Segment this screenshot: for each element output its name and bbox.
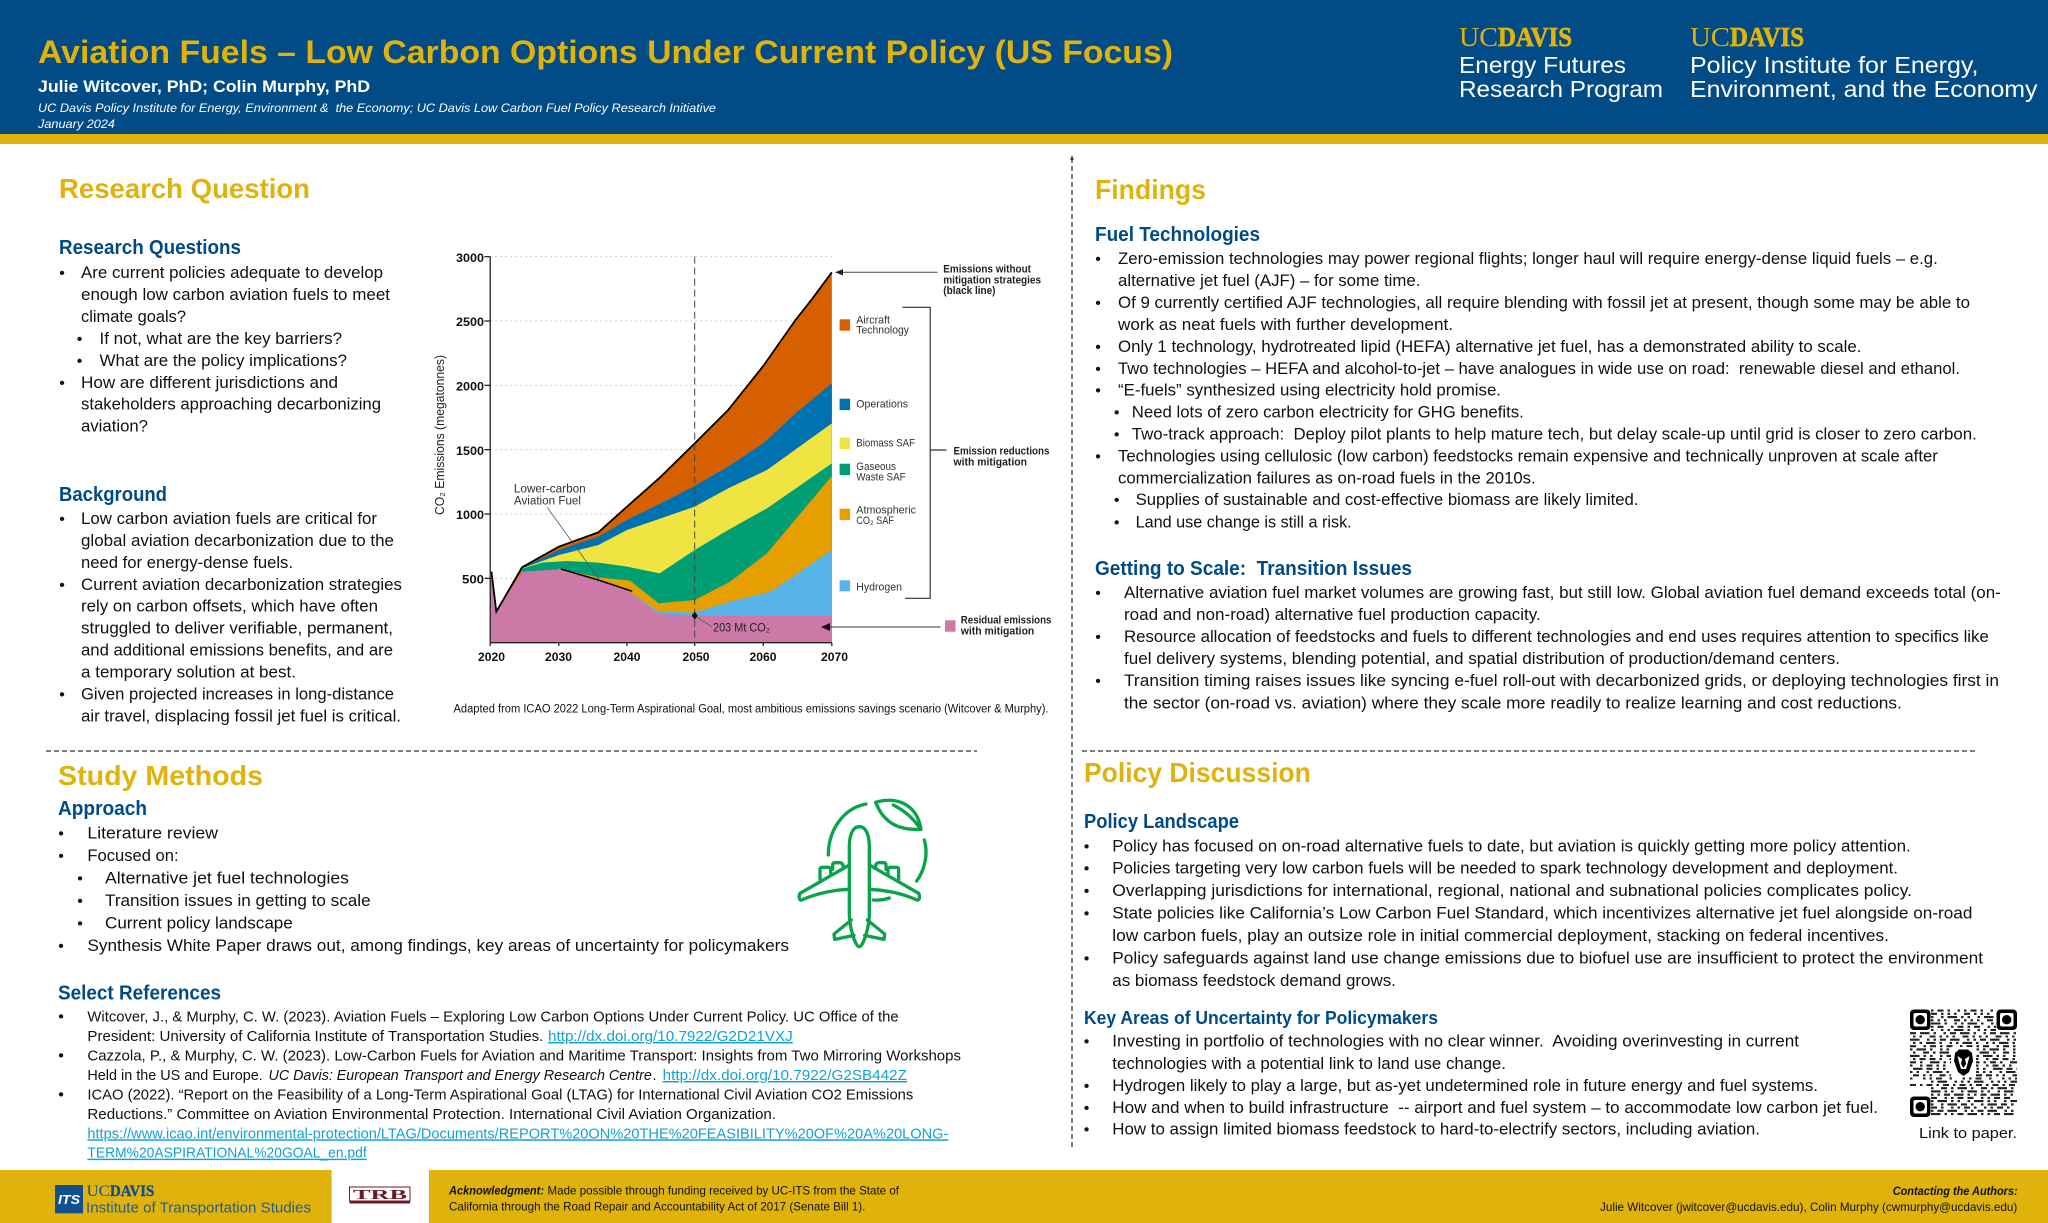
- panel: study methods: [58, 760, 961, 1162]
- date: January 2024: [37, 117, 115, 131]
- authors: Julie Witcover, PhD; Colin Murphy, PhD: [38, 78, 370, 96]
- text block: references: ICAO (2022). “Report on the Feasibility of a Long-Term Aspirational Goal (LTAG) for International Civil Aviation CO2 Emissions: [87, 1087, 913, 1103]
- text block: fuel technologies list: Zero-emission technologies may power regional flights; longer haul will require energy-dense liquid fuels – e.g.: [1118, 250, 1938, 268]
- x axis labels: [478, 650, 848, 664]
- text block: policy landscape list: •: [1084, 951, 1089, 968]
- text block: approach list: •: [58, 938, 64, 955]
- text block: references: http://dx.doi.org/10.7922/G2D21VXJ: [548, 1029, 793, 1045]
- text block: references: Witcover, J., & Murphy, C. W. (2023). Aviation Fuels – Exploring Low Carbon Options Under Current Policy. UC Office of the: [87, 1010, 899, 1026]
- callout: emissions without mitigation: mitigation strategies: [943, 274, 1041, 286]
- acknowledgment: California through the Road Repair and Accountability Act of 2017 (Senate Bill 1).: [449, 1200, 865, 1213]
- logo: TRB: [350, 1187, 410, 1204]
- subheading: fuel technologies: Fuel Technologies: [1095, 224, 1260, 246]
- callout: emission reductions bracket: with mitigation: [953, 456, 1027, 468]
- text block: references: •: [58, 1086, 64, 1103]
- contact authors: Julie Witcover (jwitcover@ucdavis.edu), Colin Murphy (cwmurphy@ucdavis.edu): [1600, 1201, 2017, 1214]
- text block: fuel technologies list: work as neat fuels with further development.: [1117, 316, 1453, 334]
- text block: policy landscape list: low carbon fuels, play an outsize role in initial commercial deployment, stacking on federal incentives.: [1112, 927, 1889, 945]
- title: Aviation Fuels – Low Carbon Options Under Current Policy (US Focus): [38, 34, 1173, 70]
- y axis labels: 500: [462, 572, 484, 586]
- text block: references: •: [58, 1009, 64, 1026]
- QR code: link to paper: [1908, 1007, 2019, 1142]
- text block: transition issues list: Alternative aviation fuel market volumes are growing fast, but still low. Global aviation fuel demand exceeds total (on-: [1124, 584, 2001, 602]
- text block: background list: •: [59, 511, 65, 528]
- text block: policy landscape list: Policy safeguards against land use change emissions due to biofuel use are insufficient to protect the environment: [1112, 950, 1983, 968]
- text block: transition issues list: Resource allocation of feedstocks and fuels to different technologies and end uses requires attention to specifics like: [1124, 628, 1989, 646]
- logo: UC Davis Policy Institute: UC: [1690, 22, 1730, 52]
- text block: research questions list: enough low carbon aviation fuels to meet: [81, 286, 390, 304]
- text block: fuel technologies list: •: [1114, 404, 1120, 422]
- text block: fuel technologies list: •: [1095, 361, 1101, 378]
- text block: research questions list: [59, 264, 390, 436]
- text block: uncertainty list: •: [1084, 1078, 1089, 1095]
- callout: lower-carbon aviation fuel: Lower-carbon: [514, 484, 586, 496]
- logo: UC Davis Institute of Transportation Studies: DAVIS: [110, 1183, 154, 1200]
- text block: approach list: •: [58, 848, 64, 865]
- logo: UC Davis Institute of Transportation Studies: [55, 1183, 311, 1216]
- text block: fuel technologies list: [1095, 250, 1977, 531]
- callout: residual emissions: Residual emissions: [961, 615, 1051, 627]
- subheading: policy landscape: Policy Landscape: [1084, 811, 1239, 833]
- text block: background list: air travel, displacing fossil jet fuel is critical.: [81, 708, 401, 726]
- chart caption: Adapted from ICAO 2022 Long-Term Aspirational Goal, most ambitious emissions savings scenario (Witcover & Murphy).: [454, 703, 1048, 715]
- text block: uncertainty list: •: [1084, 1122, 1089, 1139]
- subheading: background: Background: [59, 484, 167, 506]
- text block: uncertainty list: How and when to build infrastructure -- airport and fuel system – to accommodate low carbon jet fuel.: [1112, 1099, 1878, 1117]
- contact authors: Contacting the Authors:: [1893, 1185, 2018, 1198]
- text block: policy landscape list: Policy has focused on on-road alternative fuels to date, but aviation is quickly getting more policy attention.: [1112, 838, 1911, 856]
- text block: approach list: Literature review: [87, 825, 218, 843]
- text block: research questions list: What are the policy implications?: [100, 352, 347, 370]
- text block: references: Held in the US and Europe.: [87, 1068, 263, 1084]
- text block: fuel technologies list: •: [1095, 382, 1101, 399]
- plot areas: [484, 257, 832, 646]
- text block: uncertainty list: [1084, 1033, 1878, 1139]
- text block: policy landscape list: Overlapping jurisdictions for international, regional, national and subnational policies complicates policy.: [1112, 882, 1912, 900]
- callout: lower-carbon aviation fuel: Aviation Fuel: [514, 495, 581, 507]
- text block: references: .: [652, 1068, 656, 1084]
- text block: references: President: University of California Institute of Transportation Studies.: [87, 1029, 543, 1045]
- text block: fuel technologies list: Technologies using cellulosic (low carbon) feedstocks remain expensive and technically unproven at scale after: [1118, 448, 1938, 466]
- legend: mitigation layers: Waste SAF: [856, 472, 906, 484]
- callout: residual emissions: with mitigation: [960, 626, 1034, 638]
- text block: research questions list: aviation?: [81, 418, 148, 436]
- text block: background list: •: [59, 686, 65, 704]
- legend: mitigation layers: Operations: [856, 399, 908, 411]
- text block: transition issues list: Transition timing raises issues like syncing e-fuel roll-out with decarbonized grids, or deploying technologies first in: [1124, 672, 1999, 690]
- legend: mitigation layers: Aircraft: [856, 314, 890, 326]
- text block: fuel technologies list: •: [1095, 251, 1101, 268]
- subheading: select references: Select References: [58, 982, 221, 1004]
- logo: UC Davis Energy Futures Research Program: DAVIS: [1498, 22, 1572, 52]
- text block: background list: [59, 510, 402, 726]
- heading: research question: Research Question: [59, 173, 310, 204]
- text block: fuel technologies list: Only 1 technology, hydrotreated lipid (HEFA) alternative jet fuel, has a demonstrated ability to scale.: [1118, 338, 1862, 356]
- text block: background list: •: [59, 577, 65, 594]
- legend: mitigation layers: Technology: [856, 324, 909, 336]
- text block: references: http://dx.doi.org/10.7922/G2SB442Z: [663, 1068, 907, 1084]
- text block: background list: a temporary solution at best.: [81, 664, 296, 682]
- text block: references: TERM%20ASPIRATIONAL%20GOAL_en.pdf: [87, 1146, 368, 1162]
- heading: study methods: Study Methods: [58, 760, 263, 791]
- text block: approach list: Synthesis White Paper draws out, among findings, key areas of uncertainty for policymakers: [87, 937, 789, 955]
- text block: background list: Given projected increases in long-distance: [81, 686, 394, 704]
- text block: approach list: [58, 825, 789, 955]
- text block: research questions list: If not, what are the key barriers?: [100, 330, 342, 348]
- y axis labels: 2000: [456, 380, 484, 394]
- text block: approach list: •: [77, 893, 83, 910]
- x axis labels: 2060: [750, 650, 777, 664]
- chart: CO2 emissions stacked area: [433, 251, 1051, 715]
- text block: research questions list: •: [77, 331, 82, 348]
- text block: research questions list: •: [59, 265, 65, 282]
- text block: research questions list: stakeholders approaching decarbonizing: [81, 396, 381, 414]
- logo: UC Davis Energy Futures Research Program: Research Program: [1459, 76, 1663, 102]
- text block: uncertainty list: Investing in portfolio of technologies with no clear winner. Avoiding overinvesting in current: [1112, 1033, 1799, 1051]
- logo: UC Davis Institute of Transportation Studies: Institute of Transportation Studies: [86, 1199, 311, 1216]
- text block: fuel technologies list: Two-track approach: Deploy pilot plants to help mature tech, but delay scale-up until grid is closer to zero carbon.: [1132, 426, 1977, 444]
- text block: references: Reductions.” Committee on Aviation Environmental Protection. International Civil Aviation Organization.: [87, 1107, 776, 1123]
- text block: approach list: •: [77, 915, 83, 932]
- legend: mitigation layers: CO₂ SAF: [856, 515, 894, 527]
- panel: policy discussion: [1084, 757, 2019, 1142]
- text block: fuel technologies list: •: [1095, 295, 1101, 312]
- logo: UC Davis Energy Futures Research Program: Energy Futures: [1459, 52, 1626, 78]
- logo: UC Davis Policy Institute: Environment, and the Economy: [1690, 76, 2038, 102]
- subheading: key areas of uncertainty: Key Areas of Uncertainty for Policymakers: [1084, 1007, 1438, 1028]
- heading: policy discussion: Policy Discussion: [1084, 757, 1311, 788]
- text block: transition issues list: road and non-road) alternative fuel production capacity.: [1124, 606, 1541, 624]
- text block: fuel technologies list: •: [1114, 427, 1120, 444]
- heading: findings: Findings: [1095, 174, 1206, 205]
- text block: approach list: Transition issues in getting to scale: [105, 892, 371, 910]
- text block: fuel technologies list: Of 9 currently certified AJF technologies, all require blending with fossil jet at present, though some may be able to: [1118, 294, 1970, 312]
- text block: references: https://www.icao.int/environmental-protection/LTAG/Documents/REPORT%20ON%20THE%20FEASIBILITY%20OF%20A%20LONG-: [87, 1126, 949, 1142]
- text block: references: •: [58, 1048, 64, 1065]
- logo: UC Davis Policy Institute: DAVIS: [1730, 22, 1804, 52]
- callout: emission reductions bracket: Emission reductions: [954, 445, 1049, 457]
- y axis labels: [456, 251, 484, 586]
- x axis labels: 2020: [478, 650, 505, 664]
- logo: UC Davis Policy Institute: [1690, 22, 2038, 102]
- text block: fuel technologies list: alternative jet fuel (AJF) – for some time.: [1118, 272, 1420, 290]
- text block: fuel technologies list: Two technologies – HEFA and alcohol-to-jet – have analogues in wide use on road: renewable diesel and ethanol.: [1118, 360, 1960, 378]
- text block: policy landscape list: State policies like California’s Low Carbon Fuel Standard, which incentivizes alternative jet fuel alongside on-road: [1112, 904, 1972, 922]
- text block: transition issues list: •: [1095, 629, 1101, 646]
- text block: background list: Low carbon aviation fuels are critical for: [81, 510, 378, 528]
- text block: research questions list: climate goals?: [81, 308, 186, 326]
- callout: emissions without mitigation: [835, 263, 1041, 297]
- text block: approach list: Alternative jet fuel technologies: [105, 869, 349, 887]
- logo: UC Davis Institute of Transportation Studies: UC: [87, 1183, 110, 1200]
- text block: transition issues list: fuel delivery systems, blending potential, and spatial distribution of production/demand centers.: [1124, 650, 1840, 668]
- text block: approach list: Focused on:: [87, 847, 179, 865]
- y axis labels: 1000: [456, 508, 484, 522]
- logo: UC Davis Energy Futures Research Program: UC: [1459, 22, 1498, 52]
- subheading: approach: Approach: [58, 798, 147, 820]
- text block: uncertainty list: •: [1084, 1034, 1089, 1051]
- x axis labels: 2050: [682, 650, 710, 664]
- contact authors: [1600, 1185, 2018, 1214]
- text block: fuel technologies list: Need lots of zero carbon electricity for GHG benefits.: [1132, 404, 1524, 422]
- callout: residual emissions: [821, 615, 1051, 638]
- text block: transition issues list: [1095, 584, 2001, 713]
- text block: fuel technologies list: “E-fuels” synthesized using electricity hold promise.: [1118, 381, 1501, 399]
- x axis labels: 2040: [614, 650, 641, 664]
- text block: fuel technologies list: commercialization failures as on-road fuels in the 2010s.: [1118, 469, 1536, 487]
- text block: transition issues list: the sector (on-road vs. aviation) where they scale more readily to realize learning and cost reductions.: [1124, 695, 1902, 713]
- text block: policy landscape list: [1084, 838, 1983, 990]
- callout: lower-carbon aviation fuel: [514, 484, 586, 507]
- logo: UC Davis Energy Futures Research Program: [1459, 22, 1663, 102]
- text block: transition issues list: •: [1095, 673, 1101, 690]
- legend: mitigation layers: [840, 314, 916, 593]
- text block: references: [58, 1009, 961, 1162]
- text block: references: Cazzola, P., & Murphy, C. W. (2023). Low-Carbon Fuels for Aviation and Maritime Transport: Insights from Two Mirroring Workshops: [87, 1049, 961, 1065]
- panel: research question: [59, 173, 402, 726]
- logo: TRB: TRB: [353, 1188, 407, 1203]
- subheading: getting to scale: Getting to Scale: Transition Issues: [1095, 558, 1412, 580]
- callout: 203 Mt CO2: 203 Mt CO₂: [713, 623, 770, 635]
- text block: uncertainty list: technologies with a potential link to land use change.: [1112, 1055, 1506, 1073]
- legend: mitigation layers: Gaseous: [856, 461, 896, 473]
- text block: fuel technologies list: •: [1114, 492, 1120, 509]
- text block: fuel technologies list: •: [1095, 448, 1101, 466]
- text block: approach list: •: [58, 826, 64, 843]
- affiliation: UC Davis Policy Institute for Energy, Environment & the Economy; UC Davis Low Carbon Fuel Policy Research Initiative: [38, 101, 716, 115]
- header banner: [0, 0, 2048, 144]
- text block: uncertainty list: Hydrogen likely to play a large, but as-yet undetermined role in future energy and fuel systems.: [1112, 1077, 1818, 1095]
- text block: background list: rely on carbon offsets, which have often: [81, 598, 378, 616]
- legend: mitigation layers: Atmospheric: [856, 504, 916, 516]
- x axis labels: 2070: [821, 650, 848, 664]
- text block: fuel technologies list: •: [1114, 514, 1120, 531]
- text block: policy landscape list: •: [1084, 905, 1089, 922]
- text block: fuel technologies list: Land use change is still a risk.: [1136, 513, 1352, 531]
- footer bar: [0, 1170, 2048, 1223]
- QR caption: Link to paper.: [1919, 1125, 2017, 1142]
- text block: fuel technologies list: Supplies of sustainable and cost-effective biomass are likely limited.: [1136, 491, 1638, 509]
- text block: background list: and additional emissions benefits, and are: [81, 642, 393, 660]
- text block: background list: Current aviation decarbonization strategies: [81, 576, 402, 594]
- panel: findings: [1095, 174, 2001, 713]
- text block: research questions list: •: [77, 353, 82, 370]
- text block: policy landscape list: Policies targeting very low carbon fuels will be needed to spark technology development and deployment.: [1112, 859, 1898, 877]
- text block: policy landscape list: •: [1084, 839, 1089, 856]
- text block: policy landscape list: •: [1084, 860, 1089, 877]
- logo: UC Davis Policy Institute: Policy Institute for Energy,: [1690, 52, 1978, 78]
- text block: background list: need for energy-dense fuels.: [81, 554, 293, 572]
- callout: emission reductions bracket: [902, 307, 1049, 598]
- legend: mitigation layers: Hydrogen: [856, 581, 902, 593]
- callout: emissions without mitigation: (black line): [943, 285, 996, 297]
- y axis title: CO₂ Emissions (megatonnes): [433, 355, 447, 515]
- acknowledgment: [448, 1184, 900, 1213]
- text block: policy landscape list: as biomass feedstock demand grows.: [1112, 972, 1396, 990]
- logo: UC Davis Institute of Transportation Studies: ITS: [58, 1193, 81, 1207]
- acknowledgment: Made possible through funding received by UC-ITS from the State of: [548, 1184, 900, 1197]
- text block: approach list: •: [77, 870, 83, 887]
- text block: fuel technologies list: •: [1095, 339, 1101, 356]
- text block: uncertainty list: •: [1084, 1100, 1089, 1117]
- text block: transition issues list: •: [1095, 585, 1101, 602]
- text block: background list: global aviation decarbonization due to the: [81, 532, 394, 550]
- icon: airplane with leaf: [799, 800, 926, 947]
- text block: policy landscape list: •: [1084, 883, 1089, 900]
- text block: references: UC Davis: European Transport and Energy Research Centre: [268, 1068, 652, 1084]
- x axis labels: 2030: [545, 650, 572, 664]
- text block: research questions list: •: [59, 375, 65, 392]
- legend: mitigation layers: Biomass SAF: [856, 438, 915, 450]
- acknowledgment: Acknowledgment:: [448, 1184, 544, 1197]
- text block: research questions list: Are current policies adequate to develop: [81, 264, 383, 282]
- text block: background list: struggled to deliver verifiable, permanent,: [81, 620, 393, 638]
- y axis labels: 1500: [456, 444, 484, 458]
- y axis labels: 3000: [456, 251, 484, 265]
- subheading: research questions: Research Questions: [59, 237, 241, 259]
- text block: approach list: Current policy landscape: [105, 914, 293, 932]
- text block: uncertainty list: How to assign limited biomass feedstock to hard-to-electrify sectors, including aviation.: [1112, 1121, 1760, 1139]
- y axis labels: 2500: [456, 315, 484, 329]
- callout: emissions without mitigation: Emissions without: [943, 263, 1031, 275]
- text block: research questions list: How are different jurisdictions and: [81, 374, 338, 392]
